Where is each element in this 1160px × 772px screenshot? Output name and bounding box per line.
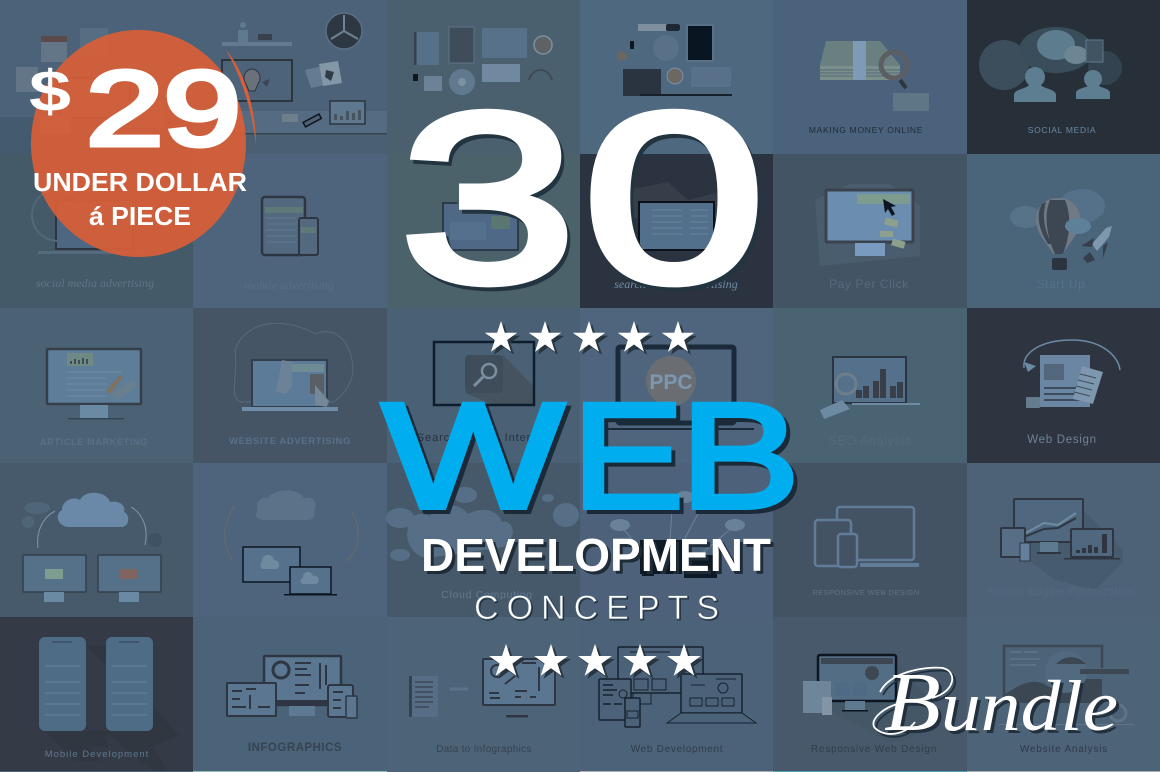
label: social media advertising: social media advertising — [36, 276, 154, 290]
tile: search icons monitor — [443, 199, 518, 250]
label: web design: Web Design — [1027, 434, 1097, 446]
badge swoosh — [226, 50, 256, 145]
label: seo analysis: SEO Analysis — [829, 434, 911, 448]
heading WEB: E — [572, 372, 684, 540]
tile: seo analysis — [820, 357, 920, 448]
tile: pay per click — [815, 184, 920, 291]
bundle script label: Bundle — [884, 656, 1118, 749]
tile: responsive web design — [812, 507, 920, 597]
label: mobile development: Mobile Development — [45, 749, 149, 760]
label: data to infographics: Data to Infographics — [436, 744, 532, 755]
tile: start up — [1010, 189, 1112, 291]
tile: social media — [979, 27, 1122, 135]
label: responsive web design: RESPONSIVE WEB DESIGN — [812, 588, 920, 597]
star row bottom — [489, 644, 701, 676]
tile: website advertising — [229, 323, 353, 447]
tile: flat-lay gadgets — [617, 24, 732, 96]
label: web development: Web Development — [631, 744, 723, 755]
tile: cloud computing devices — [225, 490, 358, 596]
tile: web design — [1024, 340, 1120, 446]
label: infographics: INFOGRAPHICS — [248, 742, 342, 754]
tile: pay per click monitor — [602, 347, 754, 430]
tile: mobile development — [39, 637, 179, 771]
label: website analysis: Website Analysis — [1020, 744, 1108, 755]
label: search engine internet: Search Engine Internet — [417, 432, 549, 444]
heading DEVELOPMENT: DEVELOPMENT — [421, 529, 771, 581]
tile: website analysis — [998, 646, 1134, 755]
tile: web development — [599, 647, 756, 755]
tile: article marketing — [40, 349, 148, 447]
price badge — [29, 30, 256, 257]
tile: mobile advertising — [244, 197, 334, 292]
tile: making money online — [809, 41, 929, 135]
label: pay per click: Pay Per Click — [829, 277, 909, 291]
label: search engine advertising: search engine advertising — [614, 277, 738, 291]
headline number 30: 0 — [583, 64, 765, 333]
tile: cloud computing — [386, 487, 579, 601]
tile: infographics — [227, 656, 357, 754]
tile: search engine optimization — [988, 499, 1134, 598]
label: article marketing: ARTICLE MARKETING — [40, 437, 148, 447]
label: responsive web design label: Responsive Web Design — [811, 744, 937, 755]
label: start up: Start Up — [1037, 277, 1085, 291]
tile: responsive web design devices — [803, 655, 937, 755]
label: cloud computing: Cloud Computing — [441, 589, 533, 601]
tile: search engine internet — [417, 342, 549, 444]
badge circle — [31, 30, 246, 257]
heading WEB: W — [382, 372, 565, 540]
tile: cloud network — [610, 491, 745, 578]
headline number 30: 3 — [400, 64, 576, 333]
tile: pay per click monitor: PPC — [649, 371, 693, 394]
tile: flat-lay office items — [413, 27, 552, 95]
tile: cloud storage — [22, 493, 162, 602]
tile: search engine advertising — [614, 182, 740, 291]
tile: data to infographics — [409, 659, 555, 755]
label: website advertising: WEBSITE ADVERTISING — [229, 436, 351, 447]
tile: code documents behind price badge — [16, 28, 165, 134]
under dollar label: UNDER DOLLAR — [33, 167, 247, 197]
price 29: 29 — [86, 50, 241, 168]
label: search engine optimization: Search Engine Optimization — [988, 586, 1134, 598]
tile: desk with clock — [193, 13, 387, 154]
label: making money online: MAKING MONEY ONLINE — [809, 125, 923, 135]
a piece label: á PIECE — [89, 201, 191, 231]
heading CONCEPTS: CONCEPTS — [474, 589, 719, 627]
star row top — [485, 321, 694, 352]
dollar sign: $ — [29, 59, 71, 124]
headline number 30 — [400, 64, 765, 333]
label: mobile advertising: mobile advertising — [244, 278, 334, 292]
tile: social media advertising — [32, 189, 154, 290]
heading WEB — [382, 372, 800, 540]
label: social media: SOCIAL MEDIA — [1028, 125, 1096, 135]
heading WEB: B — [680, 372, 800, 540]
